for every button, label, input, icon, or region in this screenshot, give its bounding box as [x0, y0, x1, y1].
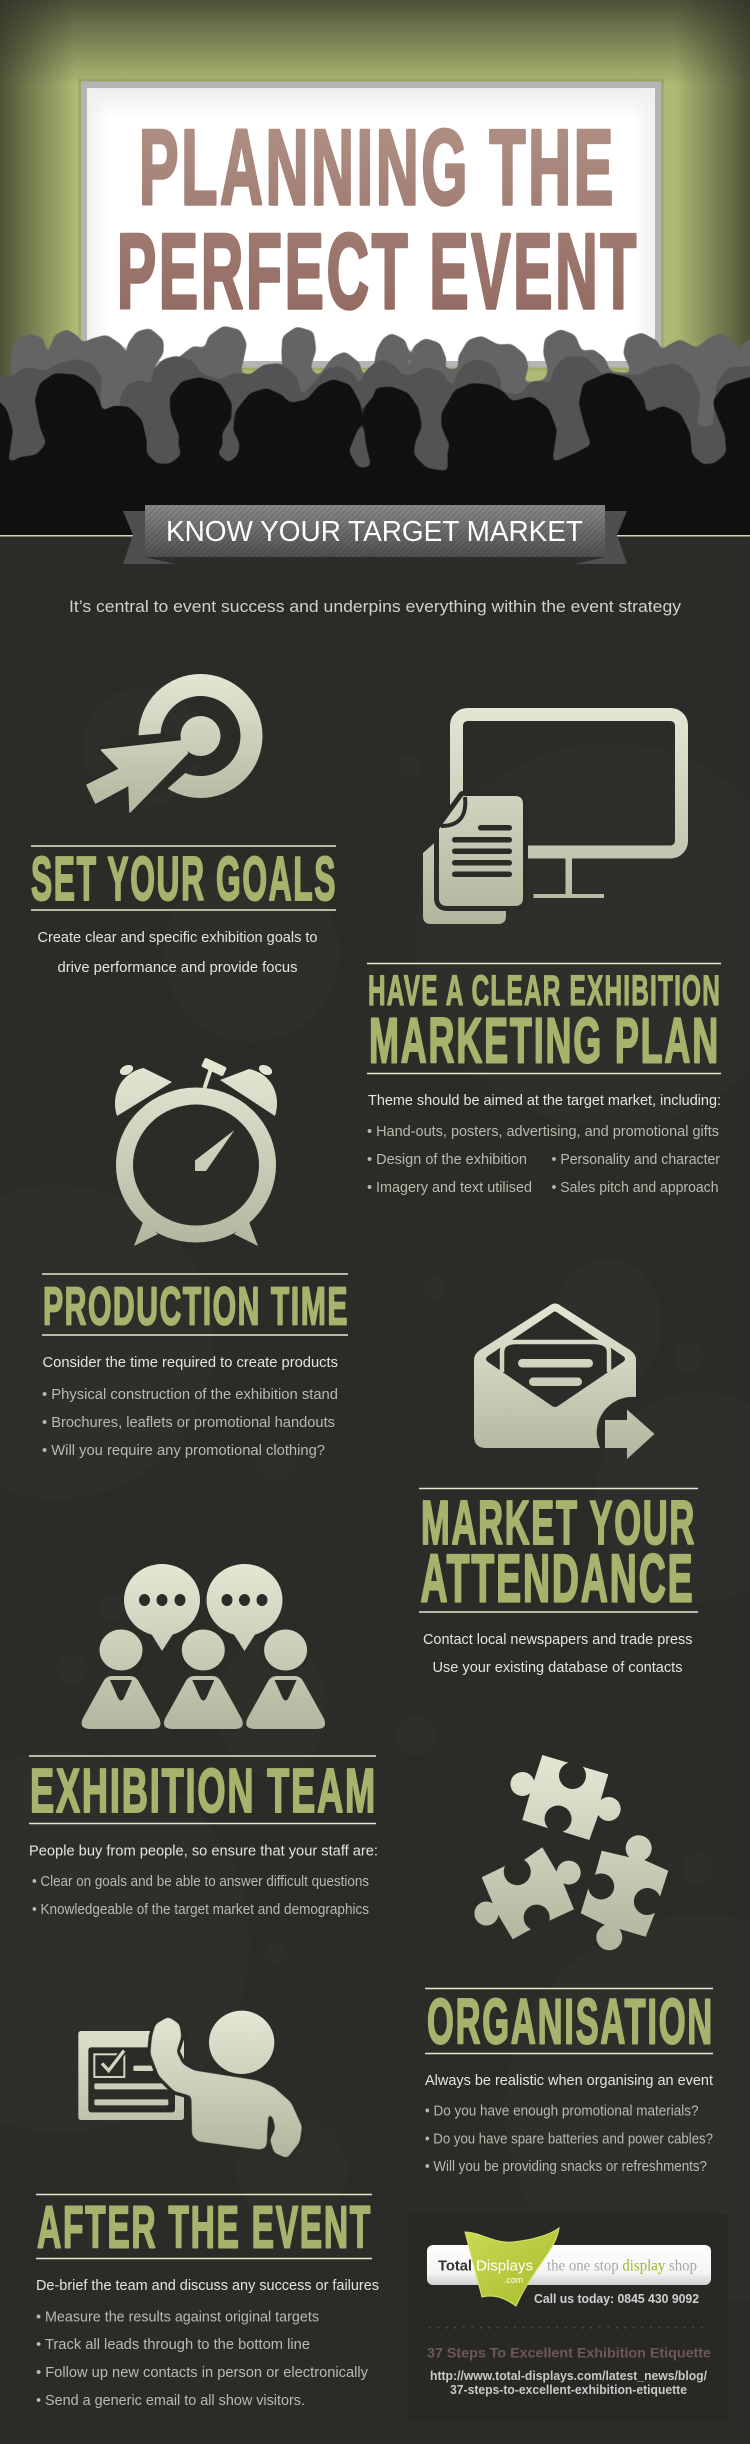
banner: know your target market: KNOW YOUR TARGET MARKET [166, 516, 583, 548]
article title: 37 Steps To Excellent Exhibition Etiquette [427, 2344, 711, 2360]
text block: drive performance and provide focus [58, 959, 298, 976]
text block: • Sales pitch and approach [552, 1179, 718, 1196]
icon: target and cursor [87, 685, 252, 815]
divider line under audience [0, 535, 750, 536]
logo: Total Displays: .com [504, 2275, 523, 2285]
panel: after the event [36, 2011, 379, 2409]
banner: know your target market [123, 505, 627, 564]
text block: • Follow up new contacts in person or electronically [36, 2364, 368, 2381]
panel: market your attendance [419, 1304, 698, 1676]
text block: • Send a generic email to all show visitors. [36, 2392, 305, 2409]
panel: set your goals [31, 685, 337, 976]
projection screen [78, 78, 664, 370]
hero: event screen and audience [0, 0, 750, 553]
text block: • Design of the exhibition [367, 1151, 527, 1168]
article link: http://www.total-displays.com/latest_news/blog/ [430, 2369, 708, 2383]
logo: Total Displays [427, 2228, 711, 2306]
logo: Total Displays: Total [438, 2258, 472, 2275]
text block: • Physical construction of the exhibition stand [42, 1386, 338, 1403]
logo: Total Displays: the one stop display shop [547, 2258, 697, 2275]
text block: • Do you have enough promotional materials? [425, 2102, 698, 2120]
icon: person at a checklist board [78, 2011, 301, 2157]
text block: • Brochures, leaflets or promotional handouts [42, 1414, 335, 1431]
audience back row [12, 326, 750, 480]
text block: • Hand-outs, posters, advertising, and promotional gifts [367, 1123, 719, 1140]
text block [423, 1631, 692, 1676]
heading [419, 1488, 698, 1616]
page fill below the audience [0, 536, 750, 566]
audience middle row [0, 356, 750, 480]
text block: Contact local newspapers and trade press [423, 1631, 692, 1648]
heading [367, 964, 721, 1076]
text block [367, 1092, 721, 1196]
text block: • Measure the results against original targets [36, 2308, 319, 2326]
text block: Always be realistic when organising an event [425, 2072, 714, 2089]
text block [36, 2277, 379, 2409]
text block: Consider the time required to create products [42, 1354, 338, 1371]
text block [425, 2072, 714, 2175]
text block: • Will you require any promotional clothing? [42, 1442, 325, 1459]
title [117, 107, 639, 331]
icon: monitor and documents [423, 714, 682, 924]
text block: • Imagery and text utilised [367, 1179, 532, 1196]
panel: organisation [425, 1755, 714, 2175]
text block: Theme should be aimed at the target market, including: [368, 1092, 721, 1109]
panel: company footer [408, 2213, 728, 2422]
text block [38, 929, 318, 976]
article link [430, 2369, 708, 2397]
icon: alarm clock [115, 1057, 277, 1246]
icon: team with speech bubbles [82, 1564, 325, 1729]
intro text: It’s central to event success and underpins everything within the event strategy [69, 597, 682, 616]
logo: Total Displays: Displays [476, 2258, 533, 2275]
heading: EXHIBITION TEAM [30, 1757, 377, 1826]
text block: De-brief the team and discuss any success or failures [36, 2277, 379, 2294]
text block: Use your existing database of contacts [432, 1659, 682, 1676]
text block: • Clear on goals and be able to answer difficult questions [32, 1873, 369, 1890]
heading: AFTER THE EVENT [37, 2194, 372, 2260]
audience front row [0, 373, 750, 553]
phone number: Call us today: 0845 430 9092 [534, 2292, 699, 2306]
text block [42, 1354, 338, 1459]
text block: Create clear and specific exhibition goals to [38, 929, 318, 946]
text block: • Personality and character [552, 1151, 720, 1168]
text block: • Knowledgeable of the target market and demographics [32, 1901, 369, 1918]
text block: • Track all leads through to the bottom line [36, 2336, 310, 2353]
text block: • Will you be providing snacks or refreshments? [425, 2158, 707, 2175]
heading: SET YOUR GOALS [31, 845, 337, 914]
text block: People buy from people, so ensure that your staff are: [29, 1842, 378, 1860]
panel: production time [42, 1057, 349, 1459]
panel: marketing plan [367, 714, 721, 1196]
text block [29, 1842, 378, 1918]
panel: exhibition team [29, 1564, 378, 1918]
icon: jigsaw pieces [474, 1755, 668, 1950]
icon: envelope with arrow [474, 1304, 654, 1459]
text block: • Do you have spare batteries and power cables? [425, 2130, 713, 2148]
heading: PRODUCTION TIME [43, 1276, 349, 1336]
background circles [0, 687, 750, 2305]
article link: 37-steps-to-excellent-exhibition-etiquette [450, 2383, 687, 2397]
